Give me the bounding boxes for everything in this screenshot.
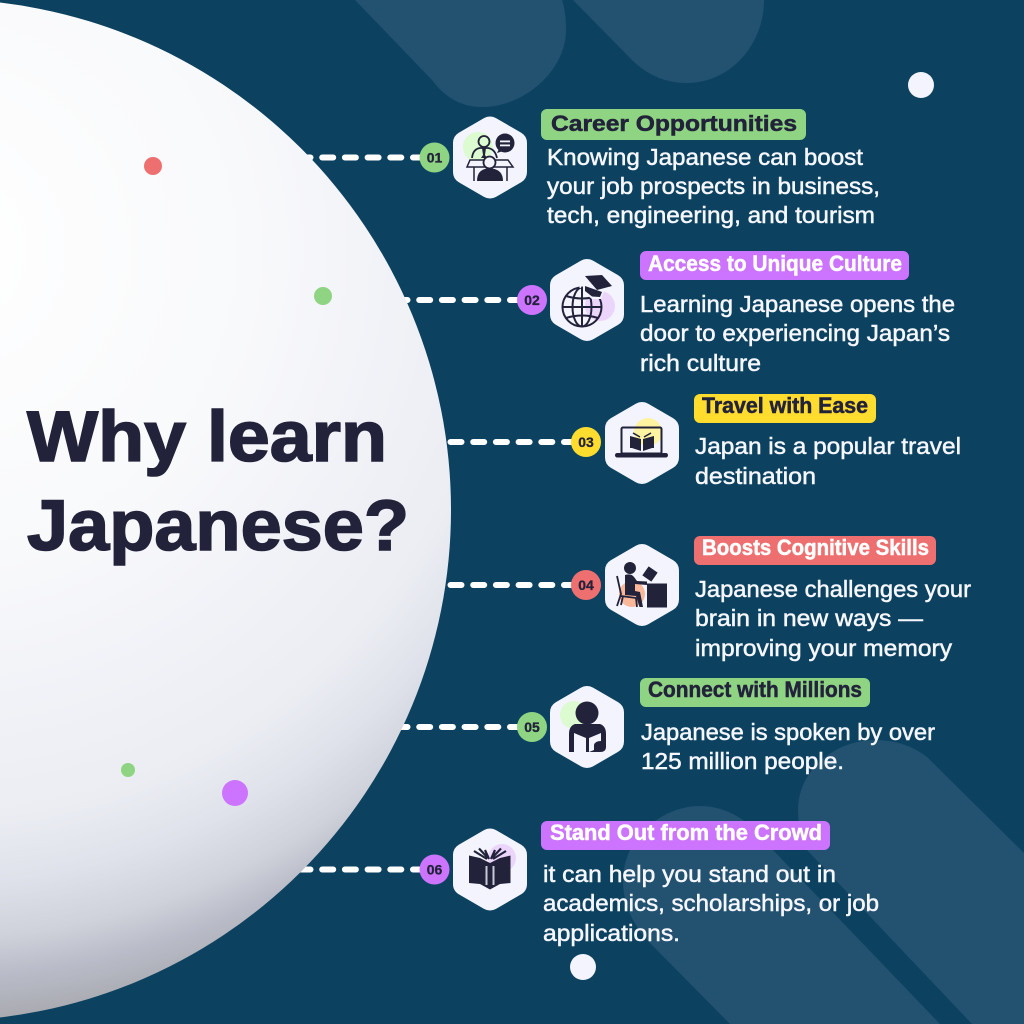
heading pill: Travel with Ease — [702, 393, 868, 418]
number badge 02 — [517, 285, 547, 315]
number badge 04: 04 — [578, 577, 594, 593]
number badge 04 — [571, 570, 601, 600]
description: destination — [695, 463, 816, 489]
description: 125 million people. — [641, 748, 844, 774]
hexagon icon: person reading — [560, 698, 612, 756]
white dot top — [908, 72, 934, 98]
description: tech, engineering, and tourism — [547, 202, 875, 228]
description — [640, 291, 955, 376]
background shape: bottom right pill back — [798, 740, 1024, 1024]
description: it can help you stand out in — [543, 861, 836, 887]
number badge 06: 06 — [427, 862, 442, 878]
title — [27, 398, 409, 566]
description — [695, 433, 961, 489]
description: brain in new ways — — [695, 605, 924, 631]
title: Why learn — [27, 398, 387, 477]
item 06: stand out — [420, 820, 879, 946]
background shape: top pill right — [573, 0, 764, 83]
heading pill: Access to Unique Culture — [648, 251, 902, 276]
description — [641, 719, 935, 774]
description: Japan is a popular travel — [695, 433, 961, 459]
description: Learning Japanese opens the — [640, 291, 955, 317]
description: Japanese challenges your — [695, 576, 971, 602]
number badge 05 — [517, 712, 547, 742]
heading pill: Boosts Cognitive Skills — [702, 535, 929, 560]
item 01: career opportunities — [420, 109, 880, 228]
number badge 06 — [420, 854, 450, 884]
heading pill: Stand Out from the Crowd — [550, 820, 822, 845]
title: Japanese? — [27, 487, 409, 566]
item 03: travel — [571, 393, 961, 489]
number badge 01: 01 — [427, 150, 442, 166]
description: rich culture — [640, 350, 761, 376]
connector lines — [290, 158, 575, 870]
heading pill: Connect with Millions — [648, 677, 862, 702]
number badge 03: 03 — [578, 434, 594, 450]
hexagon icon: person studying at desk — [617, 556, 667, 614]
hexagon icon: laptop with book — [615, 414, 668, 472]
description: academics, scholarships, or job — [543, 890, 879, 916]
description — [543, 861, 879, 946]
number badge 03 — [571, 427, 601, 457]
number badge 02: 02 — [524, 292, 540, 308]
number badge 05: 05 — [524, 719, 540, 735]
description: door to experiencing Japan’s — [640, 320, 950, 346]
description: Japanese is spoken by over — [641, 719, 935, 745]
description: applications. — [543, 920, 680, 946]
white dot bottom — [570, 954, 596, 980]
description: improving your memory — [695, 635, 952, 661]
heading pill — [541, 109, 806, 140]
item 04: cognitive skills — [571, 535, 971, 661]
description — [695, 576, 971, 661]
background shape: bottom pill front — [623, 806, 940, 1024]
number badge 01 — [420, 142, 450, 172]
hexagon icon: globe with graduation cap — [562, 271, 615, 329]
heading pill: Career Opportunities — [551, 111, 797, 136]
background shape: top pill left — [355, 0, 566, 107]
description: Knowing Japanese can boost — [547, 144, 863, 170]
description — [547, 144, 880, 228]
item 02: unique culture — [517, 251, 955, 376]
sphere dots — [121, 157, 332, 806]
hexagon icon: teacher and student — [463, 128, 515, 186]
sphere — [0, 0, 451, 1021]
item 05: connect with millions — [517, 677, 935, 774]
hexagon icon: open book — [465, 840, 516, 898]
description: your job prospects in business, — [547, 173, 880, 199]
